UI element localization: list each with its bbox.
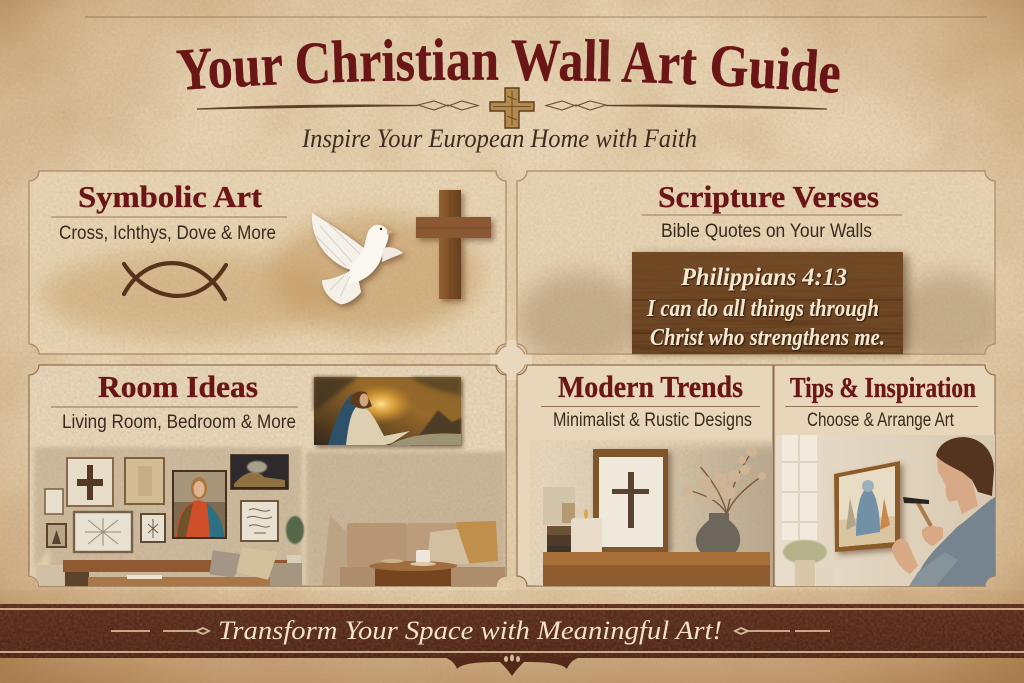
shelf scene — [530, 440, 790, 590]
heading: tips and inspiration: Tips & Inspiration — [790, 372, 976, 404]
coffee table — [369, 550, 457, 586]
subheading: symbolic art: Cross, Ichthys, Dove & More — [59, 223, 276, 244]
title ornament — [197, 88, 827, 128]
subheading: scripture verses: Bible Quotes on Your Walls — [661, 221, 872, 242]
heading: room ideas: Room Ideas — [98, 369, 258, 404]
wooden shelf — [543, 552, 770, 586]
woman with hammer — [892, 437, 995, 586]
vase — [696, 513, 740, 552]
panel: scripture verses — [515, 171, 1010, 368]
icon: wooden cross — [416, 190, 491, 299]
sofa — [322, 515, 505, 586]
right flourish — [735, 628, 830, 634]
painting: dark landscape — [231, 455, 288, 489]
candle — [571, 509, 602, 552]
icon: ornamental gold cross — [490, 88, 534, 128]
bench with pillows — [36, 549, 302, 586]
panel: room ideas — [29, 365, 506, 586]
icon: white dove — [312, 213, 403, 304]
verse text — [646, 296, 885, 351]
painting: christ at sunset — [314, 377, 463, 448]
verse reference: Philippians 4:13 — [680, 264, 847, 291]
jar and books — [543, 487, 575, 556]
title: Your Christian Wall Art Guide — [176, 38, 840, 94]
wood sign with verse — [632, 252, 908, 354]
panel: symbolic art — [29, 171, 506, 354]
room illustration — [29, 365, 506, 586]
framed cross — [593, 449, 668, 552]
plant — [286, 516, 304, 563]
heading: modern trends: Modern Trends — [558, 369, 743, 404]
heading: symbolic art: Symbolic Art — [78, 179, 263, 214]
subheading: modern trends: Minimalist & Rustic Designs — [553, 410, 752, 431]
hanging art scene — [776, 435, 995, 586]
heading: scripture verses: Scripture Verses — [658, 179, 879, 214]
bottom banner — [0, 604, 1024, 676]
verse text: Christ who strengthens me. — [650, 325, 885, 351]
panel: modern trends — [517, 365, 790, 590]
panel: tips and inspiration — [774, 365, 995, 586]
framed picture — [834, 461, 900, 552]
verse text: I can do all things through — [646, 296, 879, 322]
subheading: room ideas: Living Room, Bedroom & More — [62, 412, 296, 433]
plant and pots — [783, 540, 833, 586]
banner text: Transform Your Space with Meaningful Art! — [218, 616, 722, 645]
subheading: tips and inspiration: Choose & Arrange Art — [807, 410, 955, 431]
icon: ichthys fish — [124, 263, 226, 299]
left flourish — [111, 628, 209, 634]
gallery frames — [45, 455, 288, 552]
painting: madonna — [173, 471, 226, 538]
banner ornament — [444, 654, 580, 676]
window — [782, 435, 817, 540]
center ornament — [490, 340, 532, 380]
flowers — [683, 447, 766, 514]
subtitle: Inspire Your European Home with Faith — [301, 124, 697, 153]
